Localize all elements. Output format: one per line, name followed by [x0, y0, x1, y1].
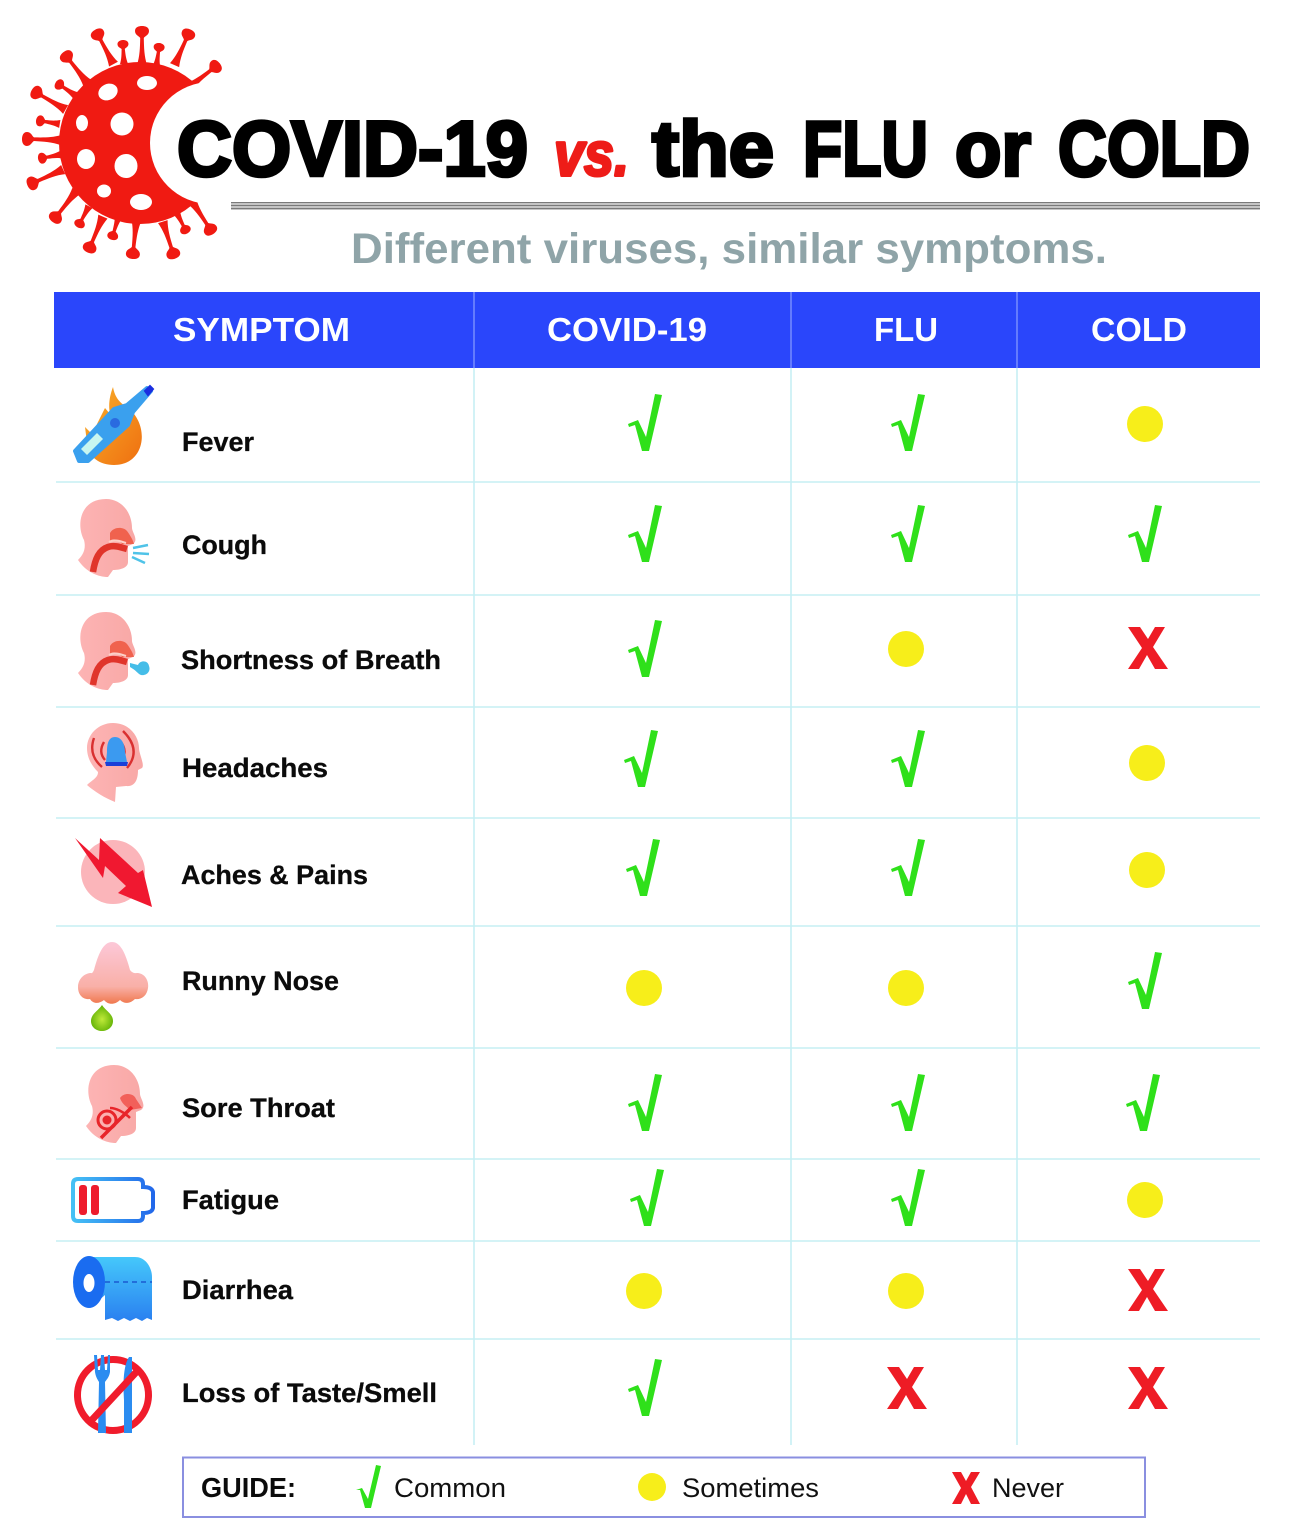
title: vs. — [554, 120, 629, 190]
title: COVID-19 — [177, 104, 528, 192]
icon: head with sore throat — [86, 1065, 143, 1143]
icon: no food — [78, 1355, 148, 1433]
label: Headaches — [182, 753, 328, 783]
table header: COVID-19 — [547, 311, 707, 348]
label: Diarrhea — [182, 1275, 294, 1305]
label: Cough — [182, 530, 267, 560]
subtitle: Different viruses, similar symptoms. — [351, 225, 1107, 273]
sometimes dot — [638, 1473, 666, 1501]
label: Fever — [182, 427, 254, 457]
icon: head with breath puff — [78, 612, 150, 690]
never cross — [952, 1472, 980, 1504]
row: Cough — [78, 499, 1162, 577]
row: Diarrhea — [73, 1256, 1168, 1321]
table header: SYMPTOM — [173, 311, 350, 348]
guide legend: Never — [992, 1473, 1064, 1503]
row: Headaches — [87, 723, 1165, 802]
row: Sore Throat — [86, 1065, 1160, 1143]
icon: head with alarm bell — [87, 723, 143, 802]
title: COLD — [1058, 104, 1250, 192]
title: or — [955, 104, 1031, 192]
icon: runny nose — [78, 942, 148, 1031]
icon: low battery — [73, 1179, 153, 1221]
guide legend: GUIDE: — [201, 1472, 296, 1503]
label: Shortness of Breath — [181, 645, 441, 675]
label: Aches & Pains — [181, 860, 368, 890]
title: the — [652, 104, 774, 192]
title — [177, 104, 1250, 192]
label: Loss of Taste/Smell — [182, 1378, 437, 1408]
guide legend: Sometimes — [682, 1473, 819, 1503]
label: Sore Throat — [182, 1093, 335, 1123]
icon: toilet roll — [73, 1256, 152, 1321]
icon: coughing head — [78, 499, 149, 577]
title: FLU — [803, 104, 928, 192]
icon: pain bolt — [75, 838, 152, 907]
label: Fatigue — [182, 1185, 279, 1215]
table header: FLU — [874, 311, 938, 348]
table header — [54, 292, 1260, 368]
row: Fatigue — [73, 1169, 1163, 1226]
row: Aches & Pains — [75, 838, 1165, 907]
virus icon — [22, 26, 272, 261]
row: Runny Nose — [78, 942, 1162, 1031]
common check — [356, 1465, 381, 1508]
table header: COLD — [1091, 311, 1187, 348]
guide legend — [183, 1458, 1145, 1517]
row: Shortness of Breath — [78, 612, 1168, 690]
label: Runny Nose — [182, 966, 339, 996]
row: Fever — [75, 386, 1163, 465]
icon: thermometer and flame — [75, 386, 153, 465]
guide legend: Common — [394, 1473, 506, 1503]
row: Loss of Taste/Smell — [78, 1355, 1168, 1433]
